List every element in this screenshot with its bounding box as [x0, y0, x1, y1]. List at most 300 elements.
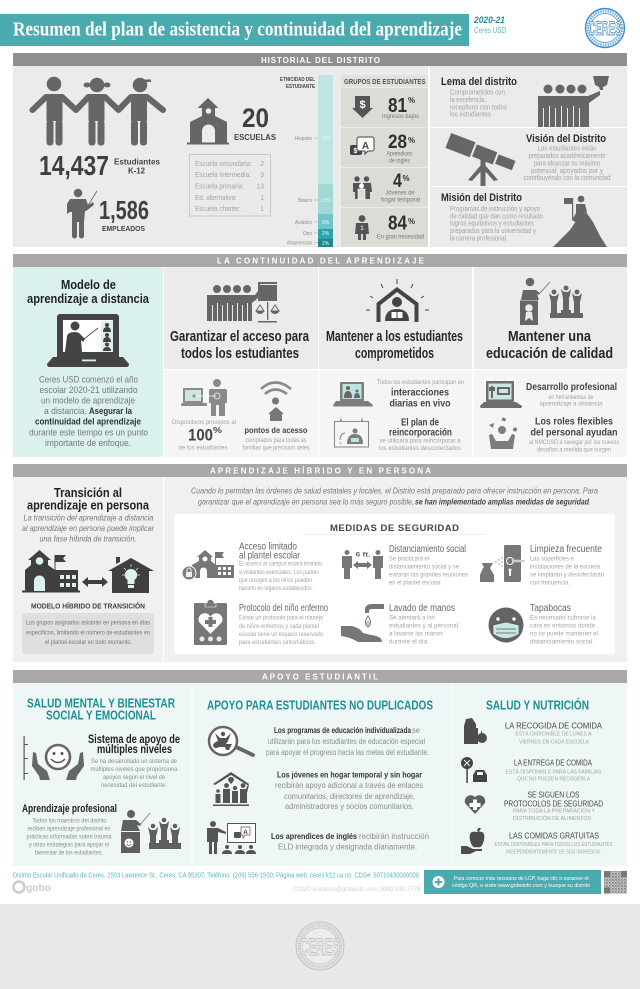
text block: professional development: Desarrollo profesional [526, 382, 617, 393]
caption: hybrid model: MODELO HÍBRIDO DE TRANSICIÓN [31, 602, 145, 610]
icon: plus [432, 876, 444, 888]
text block: sick child protocol: Existe un protocolo para el manejo [239, 614, 323, 622]
school types table: Escuela intermedia: [195, 172, 251, 179]
icon: dollar arrow [352, 96, 373, 118]
text block: limited access: que recogen a los niños pueden [239, 577, 312, 584]
icon: reengagement board [334, 417, 368, 447]
text block: professional learning [22, 803, 117, 856]
callout: hybrid groups [22, 613, 154, 654]
heading: mental health [27, 696, 175, 722]
section heading [13, 464, 627, 477]
stat: high need: % [408, 216, 415, 226]
icon: clipboard with heart [194, 600, 227, 645]
icon: three students holding hands [32, 77, 163, 146]
text block: frequent cleaning: con frecuencia. [530, 580, 570, 586]
text block: safety protocols [504, 790, 603, 822]
text block: district motto: los estudiantes [450, 112, 491, 118]
stat: schools [234, 103, 276, 142]
icon: teacher with language board [207, 821, 256, 854]
heading: transition: aprendizaje en persona [27, 498, 150, 512]
text block: limited access: al plantel escolar [239, 550, 301, 562]
text block: social distancing: Distanciamiento social [389, 544, 466, 555]
stat: low income: 81 [388, 95, 407, 117]
text block: district vision: contribuyendo con la comunidad [524, 175, 611, 182]
stat: employees [99, 195, 149, 233]
text block: english learners [271, 832, 429, 852]
text block: free meals: ESTÁN DISPONIBLES PARA TODOS LOS ESTUDIANTES [494, 841, 613, 848]
callout: more resources: Para conocer más recursos de LCP, haga clic o escanee el [454, 876, 588, 882]
icon: school to home [22, 550, 154, 593]
text block: sick child protocol: para estudiantes sintomáticos. [239, 639, 316, 646]
text block: transition description: al aprendizaje en persona puede implicar [22, 523, 155, 533]
icon: student in house [366, 279, 429, 322]
text block: district vision: potencial, apoyados por y [531, 168, 603, 175]
text block: district vision: preparados académicamente [528, 153, 606, 160]
text block: limited access: hacerlo en lugares establecidos. [239, 585, 313, 592]
icon: Ceres seal watermark [296, 922, 344, 970]
text block: safety protocols: DISTRIBUCIÓN DE ALIMENTOS [513, 815, 591, 822]
text block: flexible staff roles [529, 416, 619, 454]
text block: district motto: Comprometidos con [450, 90, 505, 96]
panel: remote learning model: aprendizaje a distancia [27, 291, 150, 306]
text block: frequent cleaning [530, 544, 604, 586]
icon: teacher [67, 189, 97, 238]
text block: individualized education: Los programas de educación individualizada [274, 726, 411, 735]
chart: student ethnicity stacked bar: Blanco [298, 198, 312, 204]
text block: individualized education: utilizarán para los estudiantes de educación especial [268, 737, 425, 746]
header banner [0, 14, 469, 46]
text block: continuidad del aprendizaje [35, 416, 141, 428]
icon: teacher with language board: A [243, 829, 248, 836]
text block: professional learning: reciben aprendizaje profesional en [28, 826, 111, 832]
stat: students: K-12 [128, 166, 145, 176]
text block: social distancing: evitarán las grandes reuniones [389, 572, 468, 578]
title: Resumen del plan de asistencia y continuidad del aprendizaje [13, 18, 462, 40]
text block: masks: distanciamiento social. [530, 638, 594, 646]
stat: english learners: Aprendices [386, 150, 413, 158]
text block: limited access: a visitantes esenciales. Los padres [239, 569, 319, 576]
stat: students: 14,437 [39, 150, 109, 181]
heading: mental health: SALUD MENTAL Y BIENESTAR [27, 696, 175, 710]
school types table: 13 [256, 184, 264, 190]
text block: in-person intro: Cuando lo permitan las órdenes de salud estatales y locales, el Distrito está preparado para ofrecer instrucción en persona. Para [191, 486, 598, 496]
text block: foster youth support: administradores y socios comunitarios. [285, 802, 414, 811]
text block: social distancing: en el plantel escolar. [389, 580, 442, 586]
text block: limited access: Acceso limitado [239, 542, 297, 552]
stat: english learners: 28 [388, 132, 407, 153]
text block: daily live interactions: interacciones [391, 388, 449, 398]
text block: social distancing: Se practicará el [389, 556, 429, 562]
stat: employees: EMPLEADOS [102, 224, 145, 233]
heading: guarantee access [170, 328, 310, 362]
stat: low income: % [408, 95, 415, 105]
text block: meal delivery: LA ENTREGA DE COMIDA [514, 758, 592, 768]
text block: multi-tiered support: Se ha desarrollado un sistema de [91, 758, 177, 765]
icon: foster family [353, 176, 372, 199]
section heading: APRENDIZAJE HÍBRIDO Y EN PERSONA [210, 466, 431, 476]
icon: teacher with podium and students [121, 810, 181, 853]
text block: flexible staff roles: desafíos a medida que surgen [537, 448, 611, 454]
chart: student ethnicity stacked bar: 78% [320, 136, 331, 142]
text block: professional learning: y otras estrategias para apoyar el [29, 842, 109, 848]
stat: high need [377, 212, 424, 240]
text block: flexible staff roles: Los roles flexibles [535, 416, 613, 428]
panel: safety measures: MEDIDAS DE SEGURIDAD [330, 523, 459, 534]
icon: face with mask [488, 608, 524, 642]
stat: schools: ESCUELAS [234, 132, 276, 142]
text block: masks: Es necesario cubrirse la [530, 614, 596, 622]
text block: meal delivery: ESTÁ DISPONIBLE PARA LAS FAMILIAS [506, 768, 602, 776]
heading: health and nutrition: SALUD Y NUTRICIÓN [486, 698, 589, 712]
text block: daily live interactions: Todos los estudiantes participan en [377, 379, 465, 386]
section heading: LA CONTINUIDAD DEL APRENDIZAJE [217, 257, 425, 266]
icon: Ceres district seal [586, 8, 624, 48]
text block: professional development [526, 382, 617, 408]
text block: social distancing [389, 544, 468, 586]
year and district label: Ceres USD [474, 25, 506, 35]
copyright: ©2020 solutions@goboinfo.com (888) 938-7779 [293, 886, 421, 893]
stat: low income [382, 95, 420, 120]
text block: access points: comprados para todas as [246, 438, 306, 444]
text block: district mission: Programas de instrucción y apoyo [450, 206, 540, 213]
text block: handwashing: estudiantes y al personal [389, 622, 458, 630]
callout: more resources: código QR, o visite www.goboinfo.com y busque su distrito [452, 883, 590, 889]
text block: reengagement plan [379, 418, 461, 452]
heading: maintain quality [486, 328, 613, 362]
stat: students [39, 150, 160, 181]
text block: sick child protocol: Protocolo del niño enfermo [239, 603, 328, 614]
school types table: Ed. alternativa: [195, 195, 237, 202]
text block: free meals [494, 830, 613, 856]
text block: safety protocols: PROTOCOLOS DE SEGURIDAD [504, 798, 603, 808]
icon: handwashing [341, 604, 384, 642]
text block: reengagement plan: se utilizará para reincorporar a [380, 438, 461, 444]
text block: professional learning: bienestar de los estudiantes. [35, 850, 103, 856]
panel: safety measures [174, 514, 615, 654]
heading: keep students engaged: comprometidos [355, 345, 434, 362]
stat: devices provided: % [213, 425, 223, 435]
panel: student groups [341, 75, 428, 247]
chart: student ethnicity stacked bar: ESTUDIANTE [286, 84, 316, 90]
section heading [13, 670, 627, 683]
stat: employees: 1,586 [99, 195, 149, 225]
text block: frequent cleaning: se limpiarán y desinfectarán [530, 572, 604, 578]
icon: spray and door handle [480, 545, 525, 582]
callout: hybrid groups: Los grupos asignados asistirán en persona en días [26, 620, 151, 626]
text block: individualized education: se [412, 726, 421, 735]
text block: frequent cleaning: instalaciones de la escuela [530, 564, 600, 570]
text block: foster youth support: Los jóvenes en hogar temporal y sin hogar [277, 770, 422, 780]
text block: in-person intro: . [589, 498, 591, 506]
panel: apoyo estudiantil [13, 670, 627, 866]
icon: laptop with teacher [47, 314, 129, 367]
text block: professional learning: Aprendizaje profesional [22, 803, 117, 815]
school types table: 3 [260, 172, 264, 179]
heading: mental health: SOCIAL Y EMOCIONAL [46, 708, 156, 722]
panel: remote learning model [13, 267, 163, 457]
icon: magnifier with child [209, 727, 253, 755]
footer contact line: Distrito Escolar Unificado de Ceres, 2503 Lawrence St., Ceres, CA 95307; Teléfono: (209) 556-1500; Página web: ceres.k12.ca.us; CDS#: 50710430000000 [13, 872, 419, 880]
chart: student ethnicity stacked bar: Otro [303, 231, 312, 237]
callout: hybrid groups: el plantel escolar en todo momento. [45, 639, 132, 646]
icon: group with book and scales [207, 282, 279, 322]
text block: individualized education: para apoyar el progreso hacia las metas del estudiante. [266, 748, 429, 757]
heading: transition [27, 485, 150, 512]
text block: escolar 2020-21 utilizando [40, 385, 138, 396]
text block: limited access: El acceso al campus estará limitado [239, 560, 322, 568]
text block: meal pickup: ESTÁ DISPONIBLE DE LUNES A [516, 730, 592, 738]
heading: keep students engaged: Mantener a los estudiantes [326, 328, 463, 345]
icon: person in need: 1 [360, 226, 364, 232]
section heading [13, 254, 627, 267]
text block: professional development: aprendizaje a distancia [540, 402, 603, 408]
callout: hybrid groups: específicos, limitando el número de estudiantes en [26, 630, 150, 636]
text block: district vision: Los estudiantes están [538, 146, 597, 152]
heading: maintain quality: educación de calidad [486, 345, 613, 362]
QR code [604, 871, 627, 894]
stat: english learners: % [408, 135, 415, 145]
text block: transition description: La transición del aprendizaje a distancia [24, 512, 154, 522]
text block: access points: pontos de acesso [244, 425, 308, 435]
school types table: 1 [260, 195, 264, 202]
chart: student ethnicity stacked bar: Hispano [295, 136, 312, 142]
heading: unduplicated students: APOYO PARA ESTUDIANTES NO DUPLICADOS [207, 698, 433, 712]
text block: free meals: LAS COMIDAS GRATUITAS [509, 830, 599, 840]
icon: language bubbles: $ [354, 148, 358, 155]
text block: reengagement plan: reincorporación [389, 428, 452, 438]
text block: district vision: para alcanzar su máximo [534, 160, 600, 168]
chart: student ethnicity stacked bar [280, 75, 333, 247]
stat: devices provided: 100 [188, 426, 213, 444]
stat: students: Estudiantes [114, 156, 160, 166]
text block: multi-tiered support: múltiples niveles que proporciona [90, 766, 178, 773]
text block: district mission: la carrera profesional [450, 236, 506, 242]
stat: foster youth: Jóvenes de [386, 190, 415, 196]
heading: maintain quality: Mantener una [508, 328, 592, 345]
text block [29, 374, 148, 449]
school types table: 2 [260, 161, 264, 168]
text block: district vision: Visión del Distrito [526, 133, 606, 145]
text block: reengagement plan: los estudiantes desconectados [379, 446, 461, 452]
footer band [0, 904, 640, 989]
section heading: APOYO ESTUDIANTIL [262, 672, 378, 682]
text block: multi-tiered support: Sistema de apoyo de [88, 734, 180, 746]
text block: flexible staff roles: del personal ayudan [530, 428, 618, 438]
text block: multi-tiered support: necesidad del estudiante. [101, 782, 167, 789]
stat: low income: Ingresos bajos [382, 113, 420, 120]
text block: handwashing: a lavarse las manos [389, 630, 443, 638]
chart: student ethnicity stacked bar: 2% [322, 231, 329, 237]
chart: student ethnicity stacked bar: 2% [322, 241, 329, 247]
text block: meal delivery [506, 758, 602, 782]
text block: sick child protocol: escolar tiene un espacio reservado [239, 631, 323, 638]
stat: foster youth: 4 [393, 171, 402, 192]
logo: gobo [14, 882, 51, 894]
text block: district mission: Misión del Distrito [441, 192, 522, 204]
icon: reengagement board: × [339, 441, 342, 447]
school types table: Escuela secundaria: [195, 161, 252, 168]
chart: student ethnicity stacked bar: ETNICIDAD DEL [280, 77, 315, 83]
icon: apple on hand [461, 828, 484, 854]
icon: Ceres seal watermark: CERES [300, 934, 340, 961]
icon: language bubbles: A [362, 141, 369, 152]
panel: remote learning model: Modelo de [61, 277, 116, 292]
text block: handwashing: Se alentará a los [389, 614, 435, 622]
text block: in-person intro [191, 486, 598, 506]
text block: sick child protocol: de niños enfermos y cada plantel [239, 623, 319, 630]
icon: staff with flexible roles [489, 417, 517, 449]
text block: english learners: ELD integrada y designada diariamente. [278, 842, 417, 852]
icon: social distancing: 6 ft. [356, 552, 371, 558]
text block: limited access [239, 542, 322, 592]
heading: transition: Transición al [54, 485, 122, 500]
icon: teacher with award and students [520, 278, 583, 325]
panel: la continuidad del aprendizaje [13, 254, 627, 457]
icon: meal delivery sign and car [461, 757, 487, 783]
text block: importante de enfoque. [45, 438, 131, 449]
text block: district motto: receptivos con todos [450, 104, 507, 112]
text block: frequent cleaning: Las superficies e [530, 556, 574, 562]
text block: flexible staff roles: al NMCUSD a navegar por los nuevos [529, 440, 619, 446]
chart: student ethnicity stacked bar: 13% [320, 198, 331, 204]
text block: district mission [441, 192, 543, 242]
icon: climber on mountain [553, 196, 607, 247]
icon: person in need [355, 215, 369, 240]
icon: laptop professional development [480, 381, 522, 408]
text block: un modelo de aprendizaje [41, 396, 135, 406]
icon: dollar arrow: $ [359, 99, 366, 111]
section heading: HISTORIAL DEL DISTRITO [261, 56, 380, 65]
text block: safety protocols: PARA TODA LA PREPARACIÓN Y [513, 808, 595, 814]
text block: individualized education [266, 726, 429, 757]
text block: durante este tiempo es un punto [29, 428, 148, 438]
icon: group raising trophy [538, 76, 609, 127]
stat: schools: 20 [242, 103, 269, 133]
stat: foster youth: hogar temporal [381, 196, 420, 204]
text block: meal pickup: VIERNES EN CADA ESCUELA [519, 740, 589, 746]
text block: daily live interactions: diarias en vivo [390, 398, 450, 410]
text block: english learners: recibirán instrucción [359, 832, 429, 841]
stat: devices provided [172, 419, 236, 452]
text block: district motto: la excelencia, [450, 97, 486, 104]
school types table: Escuela charter: [195, 206, 241, 213]
text block: district mission: de calidad que dan como resultado [450, 214, 543, 220]
icon: wifi house [261, 382, 291, 421]
text block: transition description [22, 512, 155, 544]
text block: masks [530, 603, 598, 646]
year and district label [473, 15, 506, 35]
text block: district motto [441, 76, 517, 118]
icon: telescope [445, 133, 517, 186]
school types table: Escuela primaria: [195, 184, 244, 190]
year and district label: 2020-21 [473, 15, 505, 25]
icon: school building [187, 98, 229, 144]
stat: high need: 84 [388, 212, 408, 234]
text block: professional development: en herramientas de [548, 395, 594, 401]
text block: access points: famílias que precisam deles [242, 446, 310, 452]
section heading [13, 53, 627, 66]
text block: frequent cleaning: Limpieza frecuente [530, 544, 602, 555]
icon: limited access school [182, 550, 234, 580]
heading: guarantee access: todos los estudiantes [181, 345, 299, 362]
text block: handwashing: durante el día. [389, 638, 429, 646]
stat: foster youth: % [402, 173, 410, 183]
text block: district vision [524, 133, 611, 182]
stat: devices provided: Dispositivos provistos al [172, 419, 236, 426]
text block: a distancia. [44, 406, 87, 417]
text block: in-person intro: se han implementado amplias medidas de seguridad [415, 498, 590, 506]
text block: sick child protocol [239, 603, 328, 646]
text block: foster youth support: comunitarios, directores de aprendizaje, [284, 792, 415, 801]
text block: professional learning: Todos los maestros del distrito [32, 818, 107, 824]
text block: meal delivery: QUE NO PUEDEN RECOGERLA [517, 776, 590, 782]
icon: laptop live interaction [333, 382, 373, 406]
text block: multi-tiered support: apoyos según el nivel de [103, 774, 165, 781]
text block: district mission: preparados para la universidad y [450, 228, 536, 235]
text block: foster youth support [275, 770, 423, 811]
text block: free meals: INDEPENDIENTEMENTE DE SUS INGRESOS. [506, 850, 601, 856]
text block: masks: cara en entornos donde [530, 622, 595, 630]
icon: social distancing [342, 550, 383, 579]
chart: student ethnicity stacked bar: Asiático [295, 220, 312, 226]
text block: reengagement plan: El plan de [401, 418, 439, 428]
stat: english learners [386, 132, 415, 164]
logo: gobo: gobo [26, 882, 51, 894]
panel: student groups: GRUPOS DE ESTUDIANTES [344, 79, 426, 86]
text block: multi-tiered support: múltiples niveles [97, 744, 172, 756]
text block: masks: Tapabocas [530, 603, 571, 614]
heading: keep students engaged [326, 328, 463, 362]
chart: student ethnicity stacked bar: Afroamericano [287, 240, 312, 246]
text block: multi-tiered support [88, 734, 180, 789]
text block: safety protocols: SE SIGUEN LOS [528, 790, 580, 800]
stat: devices provided: de los estudiantes [178, 444, 228, 452]
school types table [190, 154, 270, 216]
text block: meal pickup: LA RECOGIDA DE COMIDA [505, 720, 602, 730]
text block: masks: no se puede mantener el [530, 630, 598, 638]
text block: Ceres USD comenzó el año [39, 374, 138, 386]
text block: district mission: logros equitativos y estudiantes [450, 220, 534, 228]
icon: device to student [181, 379, 227, 416]
text block: access points [242, 425, 310, 452]
icon: heart with plus [465, 795, 485, 814]
school types table: 1 [260, 206, 264, 213]
heading: guarantee access: Garantizar el acceso para [170, 328, 310, 345]
text block: transition description: una fase híbrida de transición. [40, 534, 136, 544]
text block: english learners: Los aprendices de inglés [271, 832, 357, 841]
stat: high need: En gran necesidad [377, 234, 424, 240]
text block: daily live interactions [377, 379, 465, 410]
icon: language bubbles [350, 137, 374, 155]
icon: family under roof [213, 772, 249, 806]
text block: handwashing [389, 603, 458, 646]
chart: student ethnicity stacked bar: 5% [322, 220, 329, 226]
text block: foster youth support: recibirán apoyo adicional a través de enlaces [275, 781, 423, 790]
icon: hands holding smile [24, 736, 84, 780]
callout: more resources [424, 870, 601, 894]
panel: aprendizaje híbrido y en persona [13, 464, 627, 662]
stat: english learners: de inglés [389, 158, 411, 164]
text block: professional learning: prácticas informadas sobre trauma [26, 834, 112, 840]
text block: social distancing: distanciamiento social y se [389, 564, 459, 570]
text block: district motto: Lema del distrito [441, 76, 517, 88]
stat: foster youth [381, 171, 420, 204]
text block: Asegurar la [89, 406, 133, 417]
icon: meal bag [464, 718, 487, 744]
text block: handwashing: Lavado de manos [389, 603, 455, 614]
text block: meal pickup [505, 720, 602, 746]
text block: in-person intro: garantizar que el aprendizaje en persona sea lo más seguro posible, [198, 498, 414, 506]
